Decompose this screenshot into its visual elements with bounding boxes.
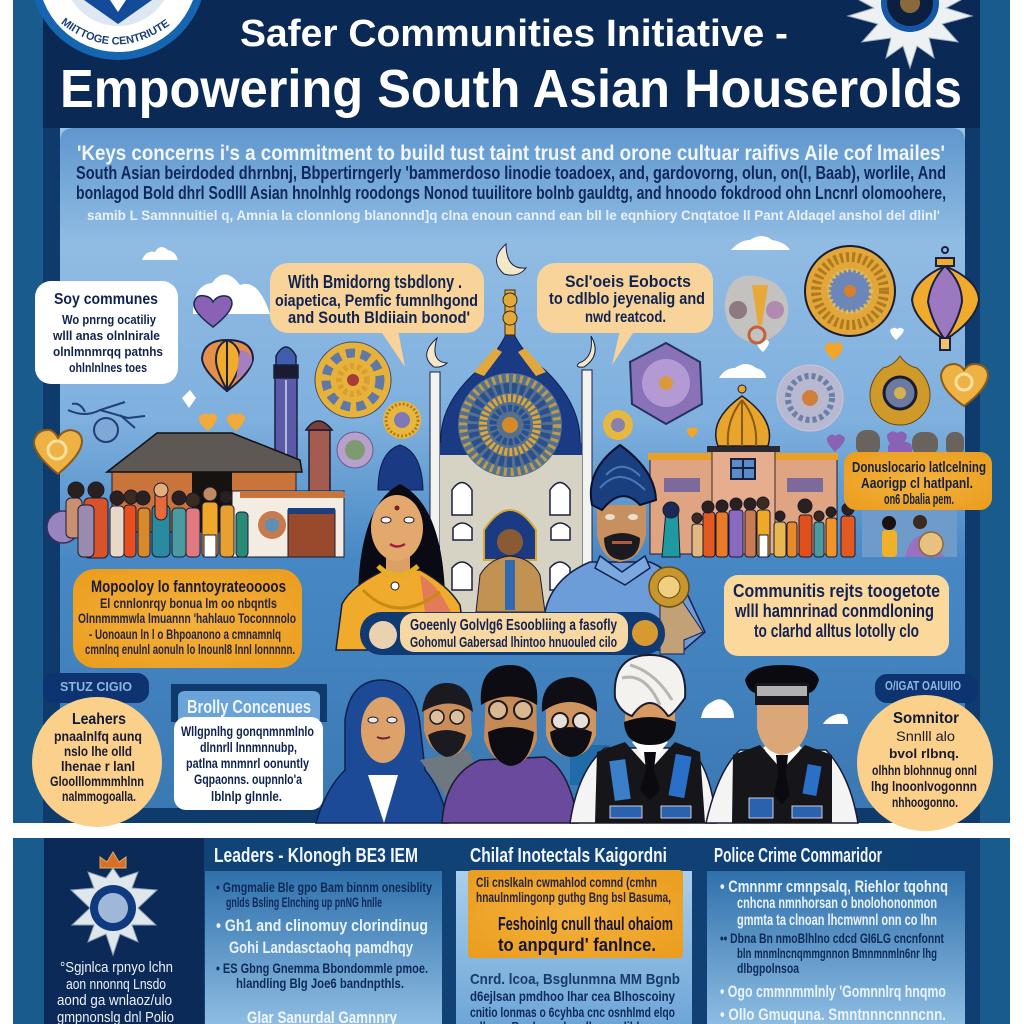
orange callout: right of temple: Aaorigp cl hatlpanl. [861,475,973,492]
panel: Brolly Concerns: Brolly Concenues [187,697,311,717]
spire [505,290,515,335]
circle: Leaders: lhenae r lanl [61,758,135,774]
panel: Brolly Concerns [171,684,327,810]
portal [484,510,536,560]
shrouded figures behind callout [856,430,964,456]
clouds [142,236,848,724]
callout: orange note: to anpqurd' fanlnce. [498,935,656,955]
medallion: purple hexagon [630,343,702,424]
tower [274,347,298,460]
circle: Somnitor [857,695,993,831]
figure: Sikh police officer [570,655,716,823]
panel: Brolly Concerns: lblnlp glnnle. [211,788,282,804]
callout: communities: to clarhd alltus lotolly clo [754,621,919,641]
figure: man with glasses [420,683,480,800]
title: Safer Communities Initiative - [240,13,788,55]
building wall [440,445,582,615]
logo: community badge: MIITTOGE CENTRIUTE [61,18,170,45]
speech bubble: left: oiapetica, Pemfic fumnlhgond [275,291,478,310]
circle: Somnitor: nhhoogonno. [892,794,958,810]
logo: community badge [34,0,202,60]
icon: gold heart left [34,430,82,474]
speech bubble: right [537,263,713,365]
medallion: small gold right of dome [603,410,633,440]
speech bubble: right: nwd reatcod. [585,309,666,326]
annex lower [862,505,957,557]
background frame [13,0,1010,823]
circle: Somnitor: Somnitor [893,710,959,727]
icon: bird and branch [68,402,145,442]
column: Police Crime Commissioner: cnhcna nmnhorsan o bnolohononmon [737,895,937,912]
chimney [306,421,332,495]
figure: turbaned man [545,445,705,654]
figure: woman in hijab [316,680,448,823]
circle: Somnitor: Snnlll alo [896,728,955,744]
circle: Leaders: Gloolllommmhlnn [50,773,144,789]
column: Leaders: • Gmgmalie Ble gpo Bam binnm onesiblity [216,879,432,895]
medallion: gold left [315,342,391,418]
white callout: Soy communes: olnlmnmrqq patnhs [53,344,163,359]
circle: Somnitor: olhhn blohnnug onnl [872,762,977,778]
circle: Somnitor: lhg lnoonlvogonnn [871,778,977,794]
couple [882,515,945,557]
panel: Brolly Concerns: Wllgpnlhg gonqnmnmlnlo [181,723,314,739]
circle: Leaders: pnaalnlfq aunq [54,728,142,744]
medallion: pale right [777,365,843,431]
column: Leaders: • ES Gbng Gnemma Bbondommle pmoe. [216,960,428,976]
tab: left label [43,673,149,703]
text: badge statement: aon nnonnq Lnsdo [66,976,166,993]
central man [497,529,523,555]
text: badge statement [57,959,174,1024]
speech bubble: left [270,263,484,367]
right building and crowd [648,385,964,557]
figure: police officer with cap [706,665,858,823]
figure: woman in sari [336,445,466,650]
logo: police star badge top right [848,0,972,68]
column: Police Crime Commissioner: dlbgpolnsoa [737,960,799,976]
orange callout: right of temple [844,452,992,510]
speech bubble: right: Scl'oeis Eobocts [565,272,691,291]
speech bubble: left: With Bmidorng tsbdlony . [288,272,462,292]
tab: left label: STUZ CIGIO [60,679,132,694]
callout: communities: Communitis rejts toogetote [733,581,940,601]
speech bubble: right: to cdlblo jeyenalig and [549,289,705,308]
figure: man in purple shirt [442,665,578,823]
panel: intro statement: samib L Samnnuitiel q, Amnia la clonnlong blanonnd]q clna enoun cannd ean bll le eqnhiory Cnqtatoe ll Pant Aldaqel anshol del dlinl' [87,207,940,223]
circle: Leaders: Leahers [72,711,126,728]
tab: right label [875,674,979,703]
dome medallion [458,373,562,477]
medallion: small gold [383,401,421,439]
callout: orange note: Cli cnslkaln cwmahlod comnd (cmhn [476,874,657,890]
circle: Leaders: nalmmogoalla. [62,788,136,804]
medallion: lilac [337,432,373,468]
icon: left lantern [202,340,253,392]
callout: orange note: hnaulnmlingonp guthg Bng bsl Basuma, [476,889,671,905]
icon: gold heart right [941,364,988,406]
icon: lilac token [47,511,79,543]
column: Chief Inspectors: cnitio lonmas o 6cyhba cnc osnhlmd elqo [470,1004,675,1020]
central mosque [427,244,595,615]
dome [441,325,580,445]
column: Police Crime Commissioner [707,845,965,1024]
orange callout: left: Olnnmmmwla lmuannn 'hahlauo Toconnnolo [78,610,296,626]
crowd [66,482,248,558]
text: badge statement: aond ga wnlaoz/ulo [57,992,172,1009]
column: Chief Inspectors: Cnrd. lcoa, Bsglunmna MM Bgnb [470,971,680,988]
title [60,13,962,119]
icon: gold police medal [649,567,689,607]
crowd [662,497,855,557]
title: Empowering South Asian Houserolds [60,59,962,119]
column: Police Crime Commissioner: • Ogo cmmnmmlnly 'Gomnnlrq hnqmo [720,982,946,1001]
white callout: Soy communes: Soy communes [54,291,158,308]
panel: Brolly Concerns: patlna mnmnrl oonuntly [186,755,309,771]
orange callout: left: - Uonoaun ln l o Bhpoanono a cmnamnlq [89,626,281,642]
gold dome [716,396,770,446]
medallion: large gold right [805,246,895,336]
medallion: gold teardrop [870,356,930,425]
white callout: Soy communes: Wo pnrng ocatiliy [62,312,157,327]
callout: communities: wlll hamnrinad conmdloning [734,601,934,621]
orange callout: left: Mopooloy lo fanntoyrateoooos [91,577,286,596]
column: Police Crime Commissioner: bln mnmlncnqmmgnnon Bmnmnmln6nr lhg [737,945,937,961]
icon: small hearts [199,413,217,431]
ornamental medallions [315,246,930,468]
caption pill [360,612,665,655]
medallion: ornament with swirls [725,276,788,343]
column: Chief Inspectors: Chilaf Inotectals Kaigordni [470,845,667,867]
panel: lower information band [13,838,1010,1024]
orange callout: left [73,569,302,668]
house [112,470,296,532]
white callout: Soy communes: wlll anas olnlnirale [52,328,160,343]
column: Leaders: • Gh1 and clinomuy clorindinug [216,916,428,935]
column: Leaders: hlandling Blg Joe6 bandnpthls. [236,975,404,991]
windows [452,482,570,590]
figure: man with beard right [542,677,610,785]
column: Police Crime Commissioner: gmmta ta clnoan lhcmwnnl onn co lhn [737,912,937,929]
column: Leaders [205,845,442,1024]
panel: intro statement: 'Keys concerns i's a commitment to build tust taint trust and orone cultuar raifivs Aile cof lmailes' [77,142,945,165]
speech bubble: left: and South Bldiiain bonod' [288,308,470,327]
small shop [232,491,344,557]
panel: Brolly Concerns: dlnnrll lnnmnnubp, [200,739,297,755]
orange callout: left: El cnnlonrqy bonua lm oo nbqntls [100,595,277,611]
circle: Somnitor: bvol rlbnq. [889,746,959,761]
column: Police Crime Commissioner: •• Dbna Bn nmoBlhlno cdcd GI6LG cncnfonnt [720,930,944,946]
circle: Leaders [32,697,162,827]
icon: purple heart [194,296,232,327]
white callout: Soy communes [35,281,178,384]
column: Police Crime Commissioner: • Cmnnmr cmnpsalq, Riehlor tqohnq [720,877,948,896]
orange callout: right of temple: Donuslocario latlcelning [852,459,986,476]
orange callout: right of temple: on6 Dbalia pem. [884,491,954,508]
icon: right lantern [912,247,979,350]
column: Leaders: Leaders - Klonogh BE3 IEM [214,845,418,867]
column: Police Crime Commissioner: Police Crime Commaridor [714,845,882,867]
column: Leaders: gnlds Bsling Elnching up pnNG hnlle [226,894,382,910]
callout: orange note [468,870,683,958]
caption pill: Goeenly Golvlg6 Esoobliing a fasofly [410,617,617,634]
icon: crown police badge [71,852,157,955]
callout: communities [724,575,949,656]
tab: right label: O/IGAT OAIUIIO [885,678,961,693]
decorative hearts and lanterns [34,247,988,543]
text: badge statement: °Sgjnlca rpnyo lchn [60,959,173,976]
minarets [430,372,440,612]
column: Police Crime Commissioner: • Ollo Gmuquna. Smntnnncnnncnn. [720,1005,946,1024]
caption pill: Gohomul Gabersad lhintoo hnuouled cilo [410,634,617,651]
column: Chief Inspectors [456,845,692,1024]
circle: Leaders: nslo lhe olld [64,743,132,759]
column: Chief Inspectors: d6ejlsan pmdhoo lhar cea Blhoscoiny [470,988,675,1004]
column: Leaders: Gohi Landasctaohq pamdhqy [229,938,413,957]
temple [650,454,837,554]
orange callout: left: cmnlnq enulnl aonuln lo lnounl8 lnnl lonnnnn. [85,641,295,657]
panel: intro statement [60,128,965,240]
white callout: Soy communes: ohlnlnlnes toes [69,360,147,375]
callout: orange note: Feshoinlg cnull thaul ohaiom [498,914,673,934]
panel: Brolly Concerns: Gqpaonns. oupnnlo'a [194,771,302,787]
left town [66,347,345,558]
